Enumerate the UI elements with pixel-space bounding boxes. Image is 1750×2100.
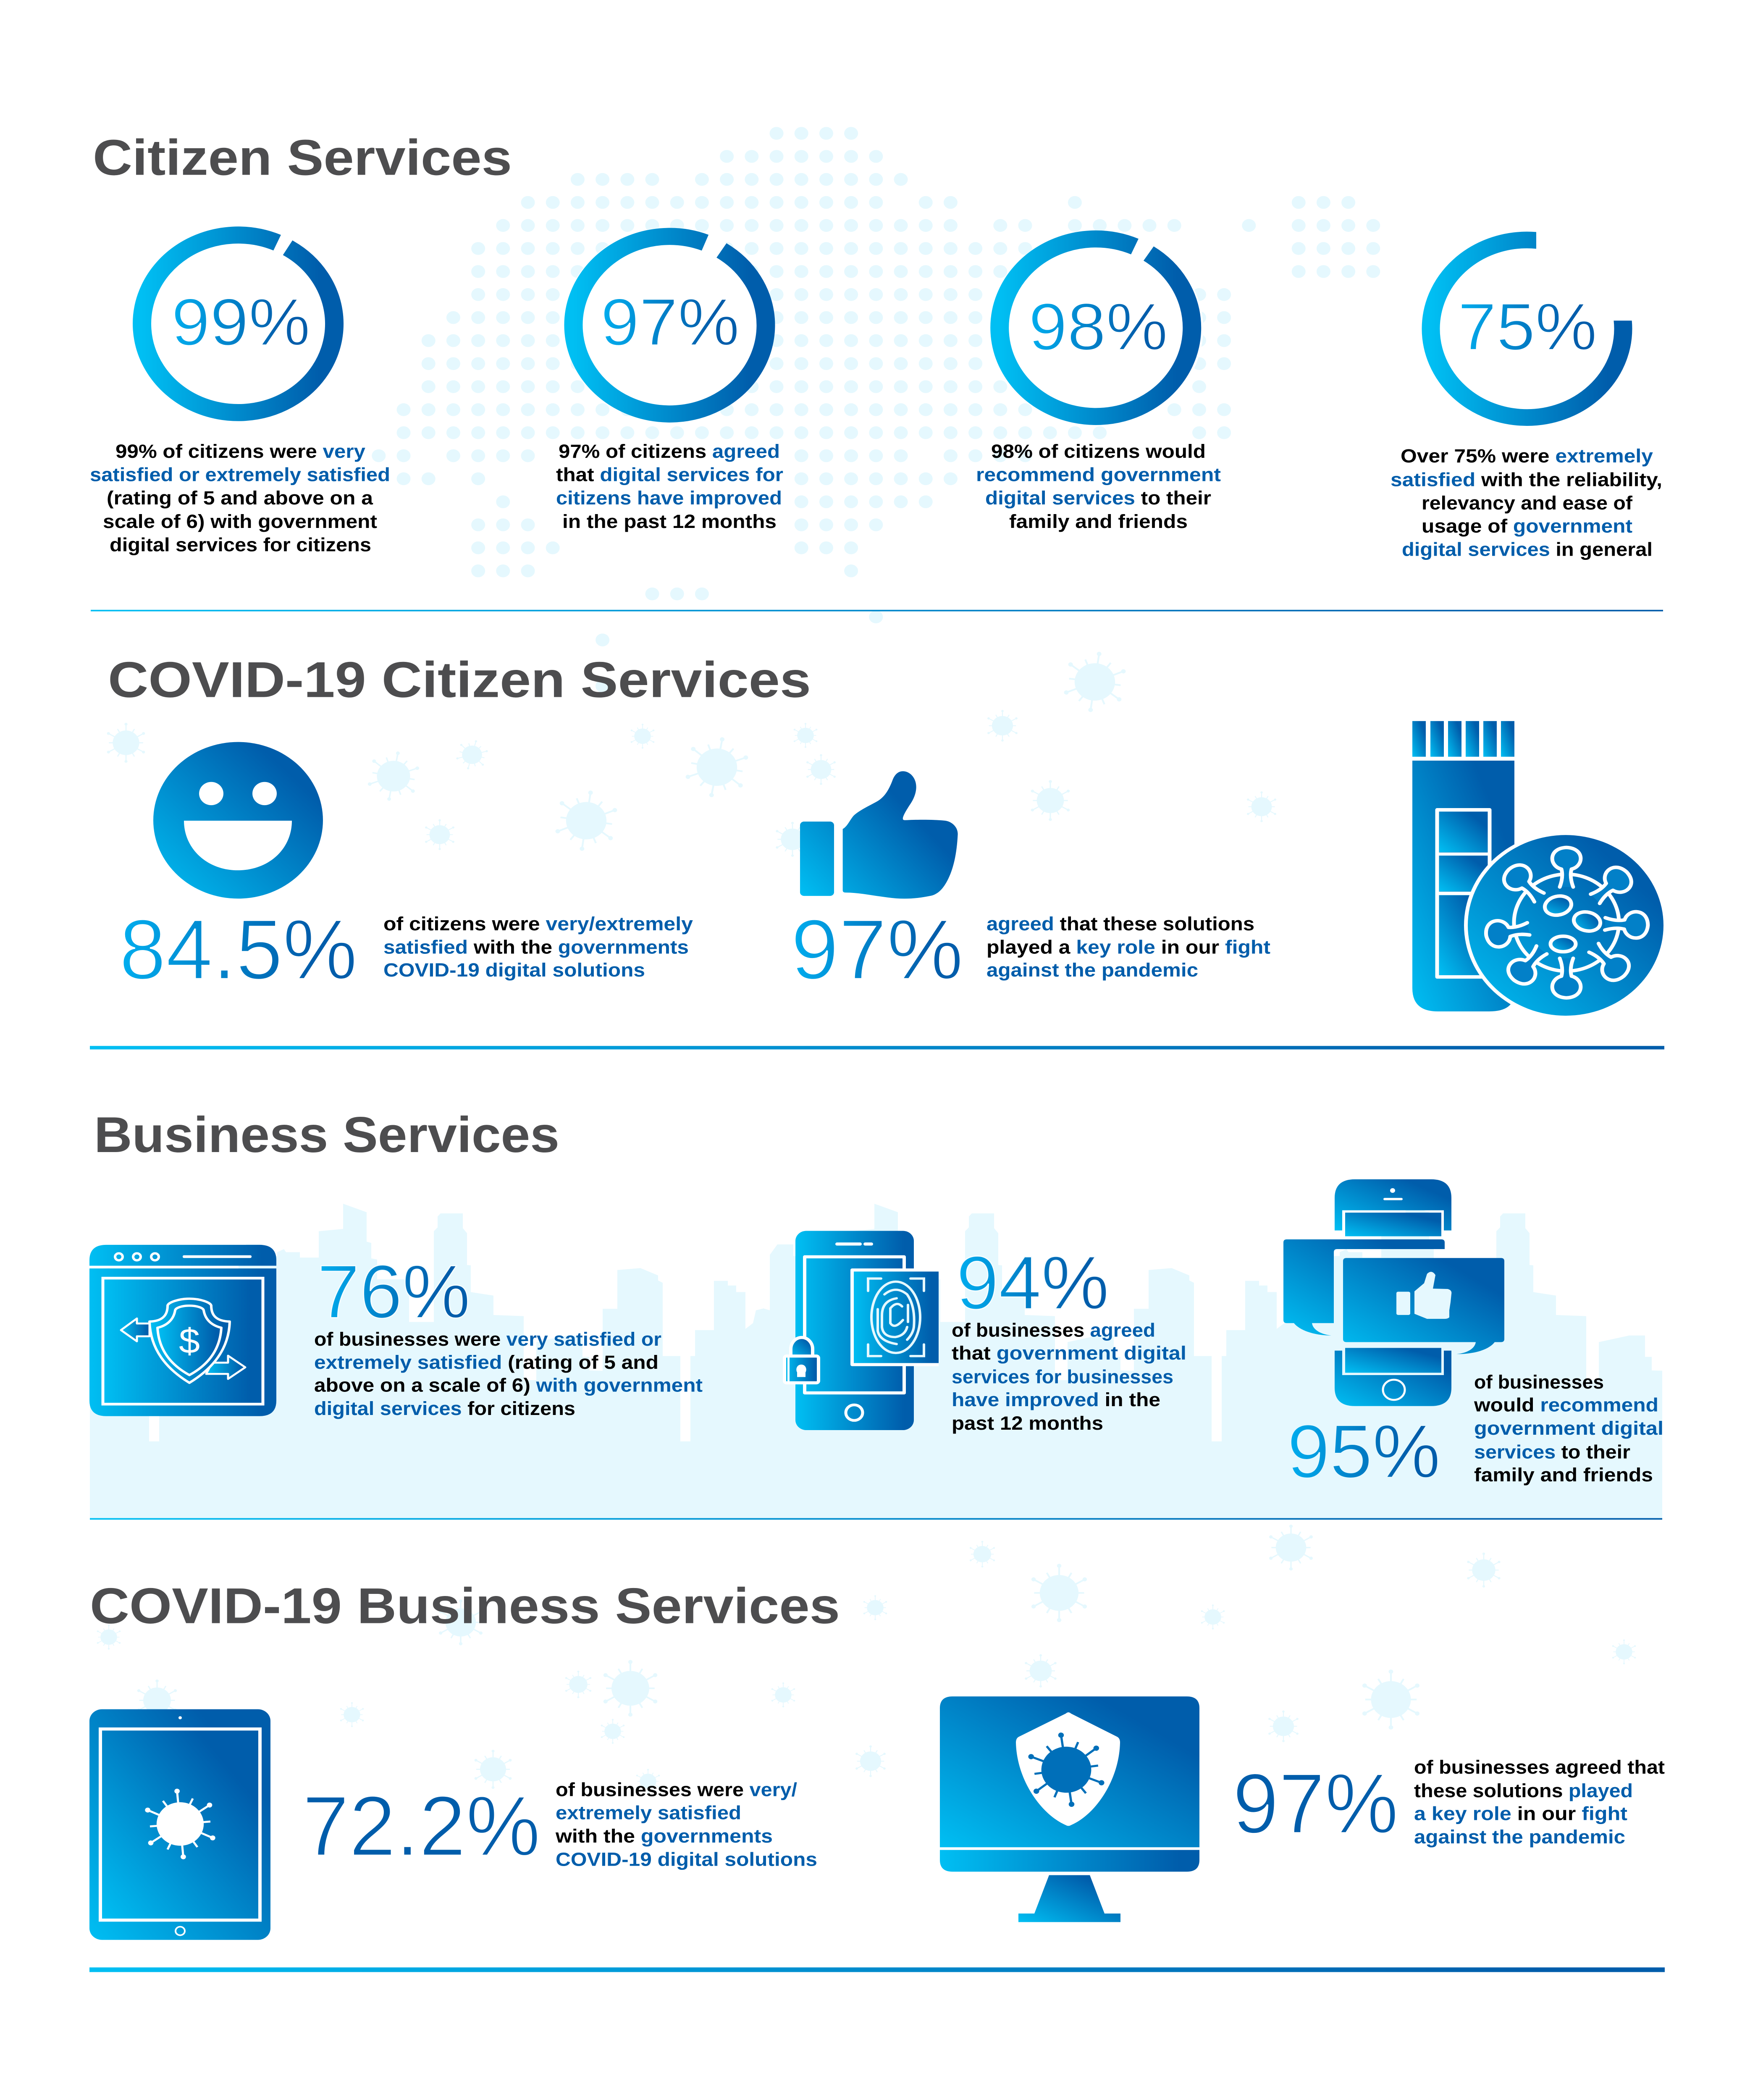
text: 98% description: family and friends	[1009, 511, 1188, 532]
text: 97% description: 97% of citizens agreed	[559, 441, 780, 462]
text: 84.5% description: satisfied with the governments	[383, 936, 689, 958]
stat: 99% ring	[135, 228, 346, 422]
stat: 94%: 94%	[956, 1240, 1109, 1325]
text: 94% description: that government digital	[952, 1342, 1186, 1364]
text: 72.2% description: of businesses were very/	[556, 1779, 797, 1800]
text: 98% description: 98% of citizens would	[991, 441, 1206, 462]
stat: 84.5%: 84.5%	[119, 901, 357, 997]
text: 99% description: (rating of 5 and above on a	[107, 487, 373, 508]
text: 72.2% description: COVID-19 digital solutions	[556, 1848, 817, 1870]
text: 76% description	[314, 1328, 703, 1419]
text: 94% description: have improved in the	[952, 1389, 1160, 1410]
text: 94% description: past 12 months	[952, 1412, 1103, 1434]
text: 72.2% description	[555, 1779, 817, 1870]
icon: smiley face	[153, 742, 323, 899]
heading: Citizen Services: Citizen Services	[93, 129, 512, 186]
text: 97% agreed description: against the pandemic	[987, 959, 1198, 981]
text: 97% description	[556, 441, 783, 532]
text: 99% description: 99% of citizens were very	[115, 441, 365, 462]
icon: phone with speech bubbles and thumb	[1283, 1179, 1504, 1406]
text: 97% description: in the past 12 months	[562, 511, 777, 532]
text: 84.5% description: of citizens were very/extremely	[383, 913, 693, 934]
text: 75% description: Over 75% were extremely	[1401, 445, 1653, 467]
stat: 97% agreed: 97%	[791, 901, 963, 997]
text: 95% description	[1474, 1371, 1663, 1485]
background: dotted world map	[379, 134, 1373, 686]
stat: 97% ring	[564, 228, 774, 422]
text: 99% description	[90, 441, 390, 555]
text: 76% description: above on a scale of 6) with government	[314, 1374, 703, 1396]
stat: 99% ring: 99%	[171, 285, 310, 360]
text: 98% description: digital services to their	[985, 487, 1211, 508]
text: 97% agreed description: played a key role in our fight	[987, 936, 1270, 958]
text: 94% description	[952, 1319, 1186, 1434]
text: 94% description: of businesses agreed	[952, 1319, 1155, 1341]
icon: browser window with shield	[89, 1245, 276, 1416]
icon: tablet with virus	[89, 1709, 270, 1940]
stat: 97% ring: 97%	[601, 285, 740, 360]
heading: COVID-19 Business Services: COVID-19 Business Services	[90, 1578, 840, 1634]
stat: 75% ring	[1431, 240, 1623, 417]
text: 99% description: digital services for citizens	[110, 534, 371, 555]
text: 97% description: citizens have improved	[556, 487, 782, 508]
icon: monitor with shield and virus	[940, 1696, 1199, 1922]
text: 76% description: extremely satisfied (rating of 5 and	[314, 1352, 659, 1373]
text: 97% description: that digital services for	[556, 464, 783, 485]
heading: COVID-19 Citizen Services: COVID-19 Citizen Services	[108, 651, 811, 708]
text: 75% description: usage of government	[1422, 515, 1632, 537]
text: 72.2% description: extremely satisfied	[556, 1802, 741, 1823]
text: 97% solutions description	[1414, 1756, 1665, 1848]
icon: thumbs up	[800, 771, 958, 899]
text: 75% description	[1391, 445, 1662, 560]
text: 95% description: of businesses	[1474, 1371, 1604, 1393]
text: 97% solutions description: a key role in our fight	[1414, 1803, 1627, 1824]
text: 95% description: would recommend	[1474, 1394, 1658, 1415]
icon: browser window with shield: $	[179, 1322, 200, 1361]
text: 72.2% description: with the governments	[555, 1825, 773, 1847]
background: virus pattern, COVID-19 business services	[98, 1526, 1635, 1793]
text: 76% description: digital services for citizens	[314, 1398, 575, 1419]
text: 98% description	[976, 441, 1221, 532]
text: 75% description: satisfied with the reliability,	[1391, 469, 1662, 490]
text: 75% description: relevancy and ease of	[1422, 492, 1632, 513]
stat: 72.2%: 72.2%	[302, 1778, 540, 1874]
heading: Business Services: Business Services	[94, 1107, 559, 1163]
stat: 97% solutions: 97%	[1233, 1756, 1398, 1851]
text: 84.5% description: COVID-19 digital solutions	[383, 959, 645, 981]
text: 95% description: services to their	[1474, 1441, 1630, 1462]
background: city skyline	[90, 1204, 1662, 1518]
text: 94% description: services for businesses	[952, 1366, 1173, 1387]
text: 98% description: recommend government	[976, 464, 1221, 485]
icon: test vial with virus	[1412, 721, 1667, 1019]
icon: phone with fingerprint and lock	[784, 1231, 939, 1430]
text: 84.5% description	[383, 913, 693, 981]
text: 97% solutions description: of businesses agreed that	[1414, 1756, 1665, 1777]
text: 97% solutions description: against the pandemic	[1414, 1826, 1625, 1848]
stat: 95%: 95%	[1287, 1409, 1440, 1494]
text: 76% description: of businesses were very satisfied or	[314, 1328, 661, 1349]
stat: 75% ring: 75%	[1458, 290, 1597, 364]
text: 95% description: family and friends	[1474, 1464, 1653, 1485]
text: 95% description: government digital	[1474, 1418, 1663, 1439]
text: 75% description: digital services in general	[1402, 538, 1653, 560]
stat: 76%: 76%	[317, 1249, 470, 1334]
background: virus pattern, COVID-19 citizen services	[108, 651, 1275, 856]
text: 99% description: satisfied or extremely satisfied	[90, 464, 390, 485]
text: 97% agreed description: agreed that these solutions	[987, 913, 1254, 934]
stat: 98% ring	[992, 231, 1203, 426]
text: 97% solutions description: these solutions played	[1414, 1780, 1633, 1801]
text: 99% description: scale of 6) with government	[103, 511, 377, 532]
stat: 98% ring: 98%	[1028, 290, 1168, 364]
text: 97% agreed description	[987, 913, 1270, 981]
